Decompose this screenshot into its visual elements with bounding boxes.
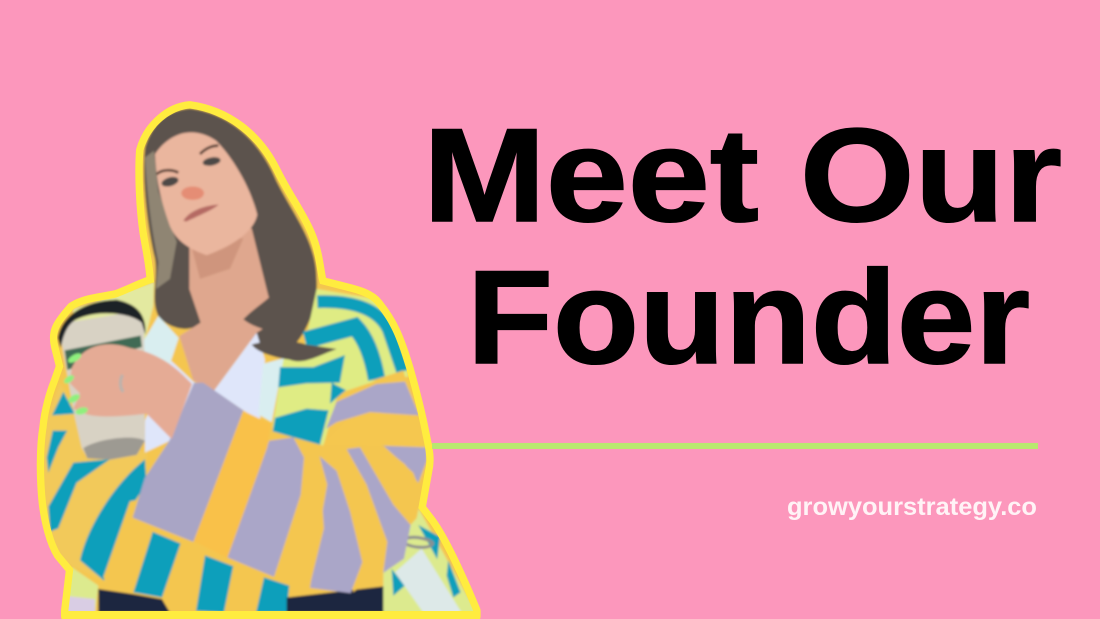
hair ends over right chest xyxy=(252,341,337,361)
eyes xyxy=(160,175,179,188)
neck shadow xyxy=(189,238,243,279)
ring xyxy=(120,375,123,392)
title line 1: Meet Our xyxy=(423,102,1062,250)
title line 2: Founder xyxy=(467,244,1030,392)
lower left lime panel xyxy=(70,566,100,608)
shirt xyxy=(145,333,265,452)
cuff xyxy=(133,383,243,542)
left body upper stripes xyxy=(40,383,147,582)
cup xyxy=(58,300,145,460)
hair xyxy=(142,108,318,344)
mouth xyxy=(183,205,219,222)
right chest xyxy=(273,289,408,446)
chest and neck xyxy=(179,228,278,391)
hair strand over chest xyxy=(242,296,280,330)
cardigan placket xyxy=(143,316,179,364)
nails xyxy=(63,351,89,416)
title xyxy=(423,102,1062,392)
yellow outline xyxy=(44,109,473,616)
right shoulder sleeve xyxy=(372,371,407,382)
hair highlight xyxy=(145,151,177,289)
nose xyxy=(181,186,204,200)
cuff yellow band xyxy=(226,414,268,558)
right lower panel and strap xyxy=(383,508,477,613)
green divider line xyxy=(432,443,1038,449)
jeans xyxy=(98,589,170,613)
founder portrait cut-out with yellow outline xyxy=(30,90,497,619)
hand xyxy=(70,344,192,439)
portrait contents xyxy=(44,108,474,611)
shoulder left xyxy=(70,282,154,346)
website url: growyourstrategy.co xyxy=(787,493,1037,521)
lower hem stripes xyxy=(102,498,146,580)
sleeve stripes xyxy=(381,444,420,525)
eyebrows xyxy=(157,170,178,174)
face xyxy=(155,132,257,255)
